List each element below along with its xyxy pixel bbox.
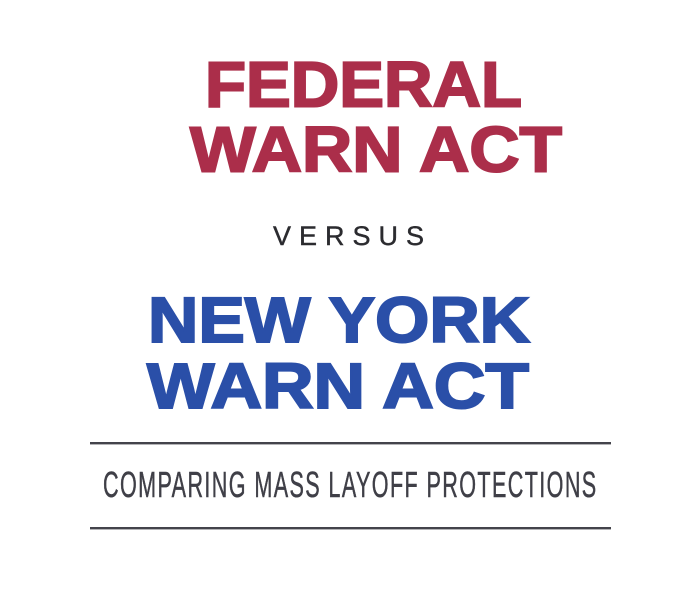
heading: New York WARN Act: NEW YORK bbox=[148, 284, 530, 356]
subtitle block with rules: COMPARING MASS LAYOFF PROTECTIONS bbox=[103, 465, 596, 505]
heading: Federal WARN Act bbox=[190, 48, 562, 186]
text: versus: VERSUS bbox=[273, 221, 424, 251]
heading: New York WARN Act: WARN ACT bbox=[147, 350, 529, 422]
heading: Federal WARN Act: FEDERAL bbox=[205, 48, 522, 120]
heading: New York WARN Act bbox=[147, 284, 530, 422]
heading: Federal WARN Act: WARN ACT bbox=[190, 114, 562, 186]
